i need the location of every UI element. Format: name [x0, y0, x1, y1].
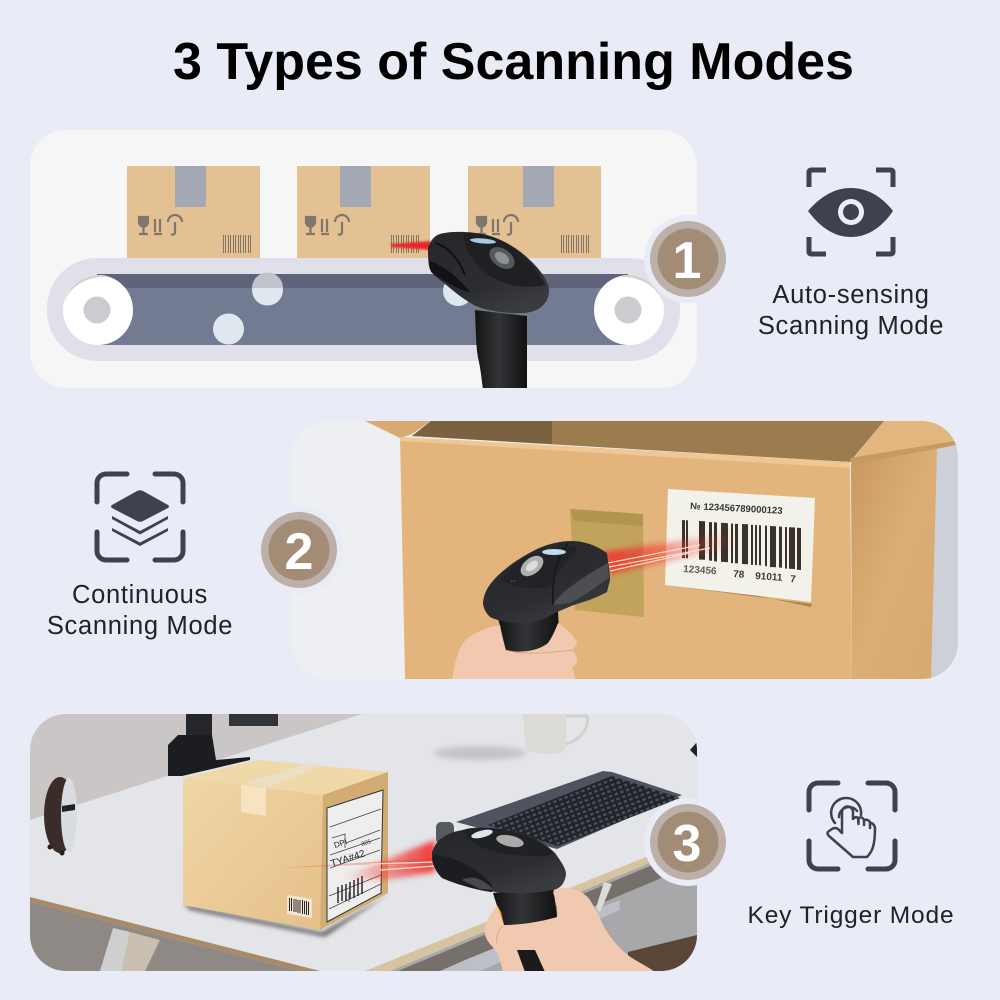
laser beam [604, 533, 735, 574]
desk clock [44, 777, 77, 856]
badge 3 [644, 798, 732, 886]
shipping box [183, 760, 389, 937]
desk arm mount [168, 714, 278, 776]
scanner [428, 232, 549, 390]
finger crease [505, 650, 573, 653]
barcode label: 7 [790, 574, 797, 585]
parcel 1 [127, 166, 260, 258]
parcel 2 [297, 166, 430, 258]
mug [434, 714, 588, 760]
small dark object on desk [690, 742, 697, 757]
barcode label: 123456 [683, 564, 717, 577]
icon: touch hand in scan frame [809, 783, 895, 869]
badge 1: 1 [673, 232, 701, 290]
desk top [30, 715, 358, 820]
laser beam [391, 241, 431, 250]
barcode label: 78 [733, 569, 745, 581]
hand [485, 888, 655, 972]
shipping label: DPI [333, 837, 348, 850]
under desk right [390, 863, 697, 971]
handle bottom [540, 667, 560, 681]
scanner [432, 828, 566, 925]
wall right [931, 444, 958, 678]
shipping label: TYA#42 [330, 848, 367, 870]
box side [851, 449, 937, 680]
badge 1 [644, 215, 732, 303]
scanner [483, 541, 610, 655]
barcode label: № 123456789000123 [690, 501, 783, 517]
icon: eye in scan frame [808, 170, 893, 254]
panel: key trigger desk scene [30, 714, 697, 975]
label: scanning mode 1: Scanning Mode [758, 312, 944, 340]
icon: layers in scan frame [97, 474, 183, 560]
barcode label: 91011 [755, 571, 783, 584]
hand [452, 623, 577, 681]
label: continuous: Continuous [72, 581, 208, 609]
box tape [245, 763, 323, 787]
badge 3: 3 [673, 815, 701, 873]
desk front edges [30, 897, 320, 971]
handle bottom [517, 950, 545, 972]
barcode sticker [287, 895, 312, 918]
barcode label [665, 489, 815, 607]
badge 2: 2 [285, 523, 313, 581]
laser beam [280, 840, 435, 880]
panel: auto-sensing conveyor scene [30, 130, 697, 390]
finger crease [497, 925, 504, 943]
conveyor belt [47, 258, 680, 361]
box interior [412, 421, 884, 462]
box front [400, 437, 852, 680]
label: scanning mode 2: Scanning Mode [47, 612, 233, 640]
label: key trigger: Key Trigger Mode [748, 902, 954, 929]
wall [30, 714, 362, 820]
tape [570, 509, 644, 617]
label: auto-sensing: Auto-sensing [772, 281, 930, 309]
box flaps [365, 421, 956, 466]
parcel 3 [468, 166, 601, 258]
panel: continuous scanning box scene [365, 421, 958, 679]
title: 3 Types of Scanning Modes [173, 33, 854, 91]
badge 2 [255, 506, 343, 594]
keyboard [456, 771, 682, 849]
yellow grip stripe [553, 632, 559, 652]
shipping label [327, 790, 383, 922]
under desk left [30, 902, 300, 971]
yellow grip stripe [496, 905, 504, 925]
cylinder near keyboard [436, 822, 454, 844]
shipping label: 805 [361, 839, 373, 848]
